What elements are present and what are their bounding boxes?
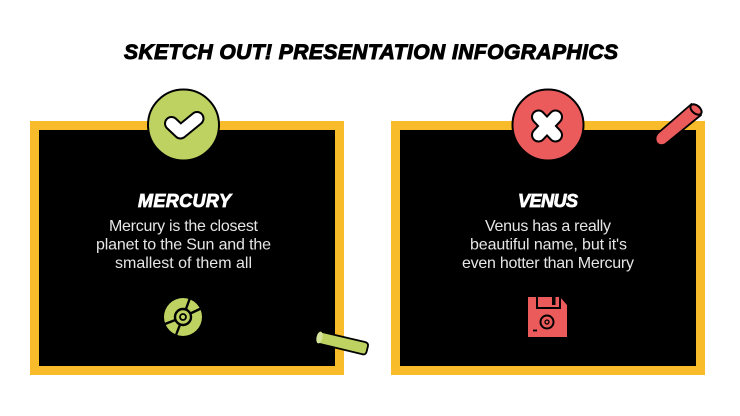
text: venus description: even hotter than Mercury bbox=[462, 255, 634, 272]
text: mercury description bbox=[96, 218, 271, 272]
icon: compact disc bbox=[164, 298, 202, 336]
chalk: red bbox=[655, 102, 704, 145]
title: SKETCH OUT! PRESENTATION INFOGRAPHICS bbox=[124, 41, 618, 64]
icon: floppy disk bbox=[528, 297, 567, 337]
text: mercury description: Mercury is the closest bbox=[109, 218, 259, 235]
heading: mercury: MERCURY bbox=[138, 191, 233, 211]
heading: venus: VENUS bbox=[518, 191, 578, 211]
text: mercury description: planet to the Sun and the bbox=[96, 236, 271, 254]
chalk: green bbox=[315, 331, 368, 354]
panel frame: mercury bbox=[34, 126, 340, 370]
badge: check bbox=[148, 90, 219, 160]
text: venus description bbox=[462, 218, 634, 272]
panel: mercury bbox=[34, 90, 368, 370]
panel frame: venus bbox=[396, 126, 700, 370]
panel: venus bbox=[396, 90, 704, 370]
text: venus description: Venus has a really bbox=[485, 218, 611, 235]
text: mercury description: smallest of them all bbox=[115, 255, 252, 272]
text: venus description: beautiful name, but it's bbox=[470, 236, 627, 254]
badge: cross bbox=[512, 90, 584, 160]
